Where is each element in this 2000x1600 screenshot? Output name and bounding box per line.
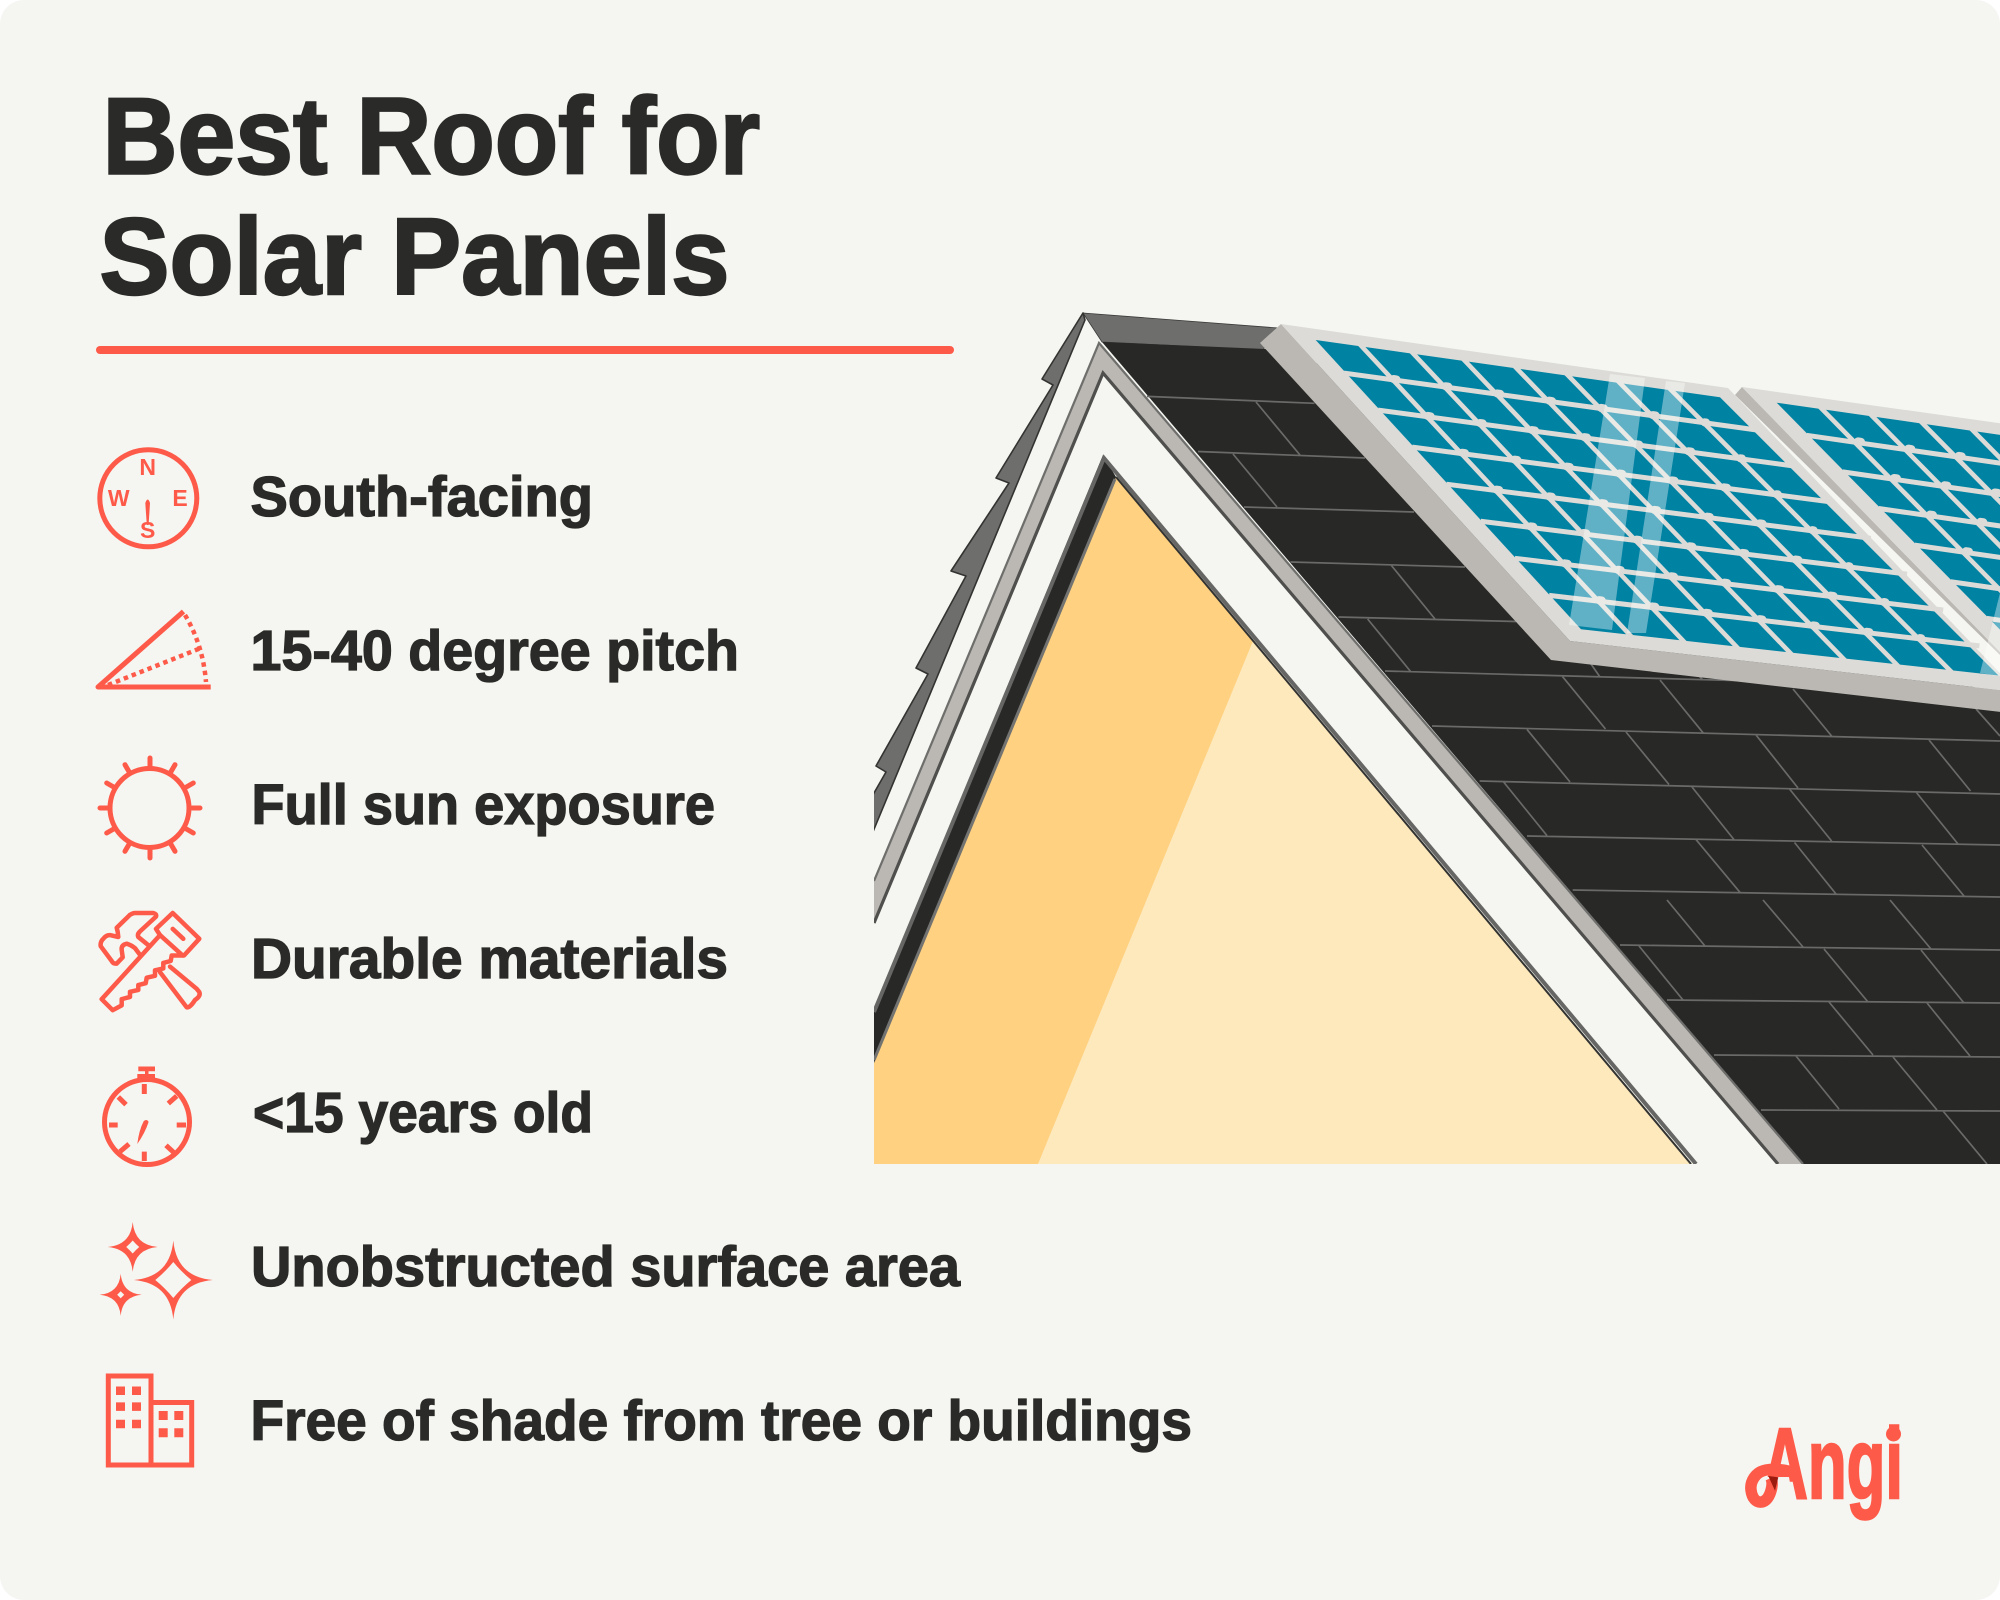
icon: compass: E	[172, 485, 188, 511]
label: unobstructed: Unobstructed surface area	[251, 1235, 961, 1299]
dark soffit strip	[874, 455, 1696, 1164]
icon: compass: W	[108, 485, 130, 511]
icon: stopwatch	[104, 1066, 190, 1164]
title: Solar Panels	[100, 196, 730, 318]
solar panel 1 cells	[1316, 339, 1998, 681]
icon: compass: S	[140, 517, 155, 543]
rake shingle edge	[870, 313, 1085, 839]
solar panel 1 glare	[1569, 374, 1685, 633]
Angi logo: Angi	[1762, 1408, 1903, 1520]
label: free of shade: Free of shade from tree or buildings	[250, 1389, 1192, 1453]
label: pitch: 15-40 degree pitch	[250, 619, 739, 683]
label: sun: Full sun exposure	[252, 773, 715, 837]
icon: sun	[100, 758, 200, 858]
silver barge trim	[874, 343, 1803, 1164]
solar panel 2 glare	[1980, 593, 2000, 676]
icon: roof pitch	[98, 612, 211, 687]
gable wall lit	[1038, 641, 1692, 1164]
solar panel 1 frame side	[1260, 324, 2000, 714]
ridge cap	[1083, 313, 1278, 350]
icon: compass	[100, 450, 197, 547]
Angi logo	[1750, 1408, 1903, 1520]
icon: compass: N	[139, 454, 156, 480]
title	[100, 76, 760, 318]
red title rule	[96, 346, 954, 354]
solar panel 1 face	[1281, 324, 2000, 692]
title: Best Roof for	[102, 76, 760, 198]
label: age: <15 years old	[253, 1081, 593, 1145]
illustration: roof with solar panels	[870, 313, 2000, 1164]
label: durable materials: Durable materials	[251, 927, 728, 991]
label: south-facing: South-facing	[250, 465, 593, 529]
icon: buildings	[108, 1376, 192, 1465]
solar panel 2 frame side	[1735, 387, 2000, 655]
icon: hammer and saw	[101, 913, 200, 1010]
gable wall shaded	[874, 477, 1692, 1164]
shingle lines	[1147, 396, 2000, 1164]
icon: sparkles	[100, 1222, 213, 1320]
solar panel 2 face	[1742, 387, 2000, 662]
roof surface	[1102, 342, 2000, 1164]
solar panel 2 cells	[1776, 402, 2000, 630]
